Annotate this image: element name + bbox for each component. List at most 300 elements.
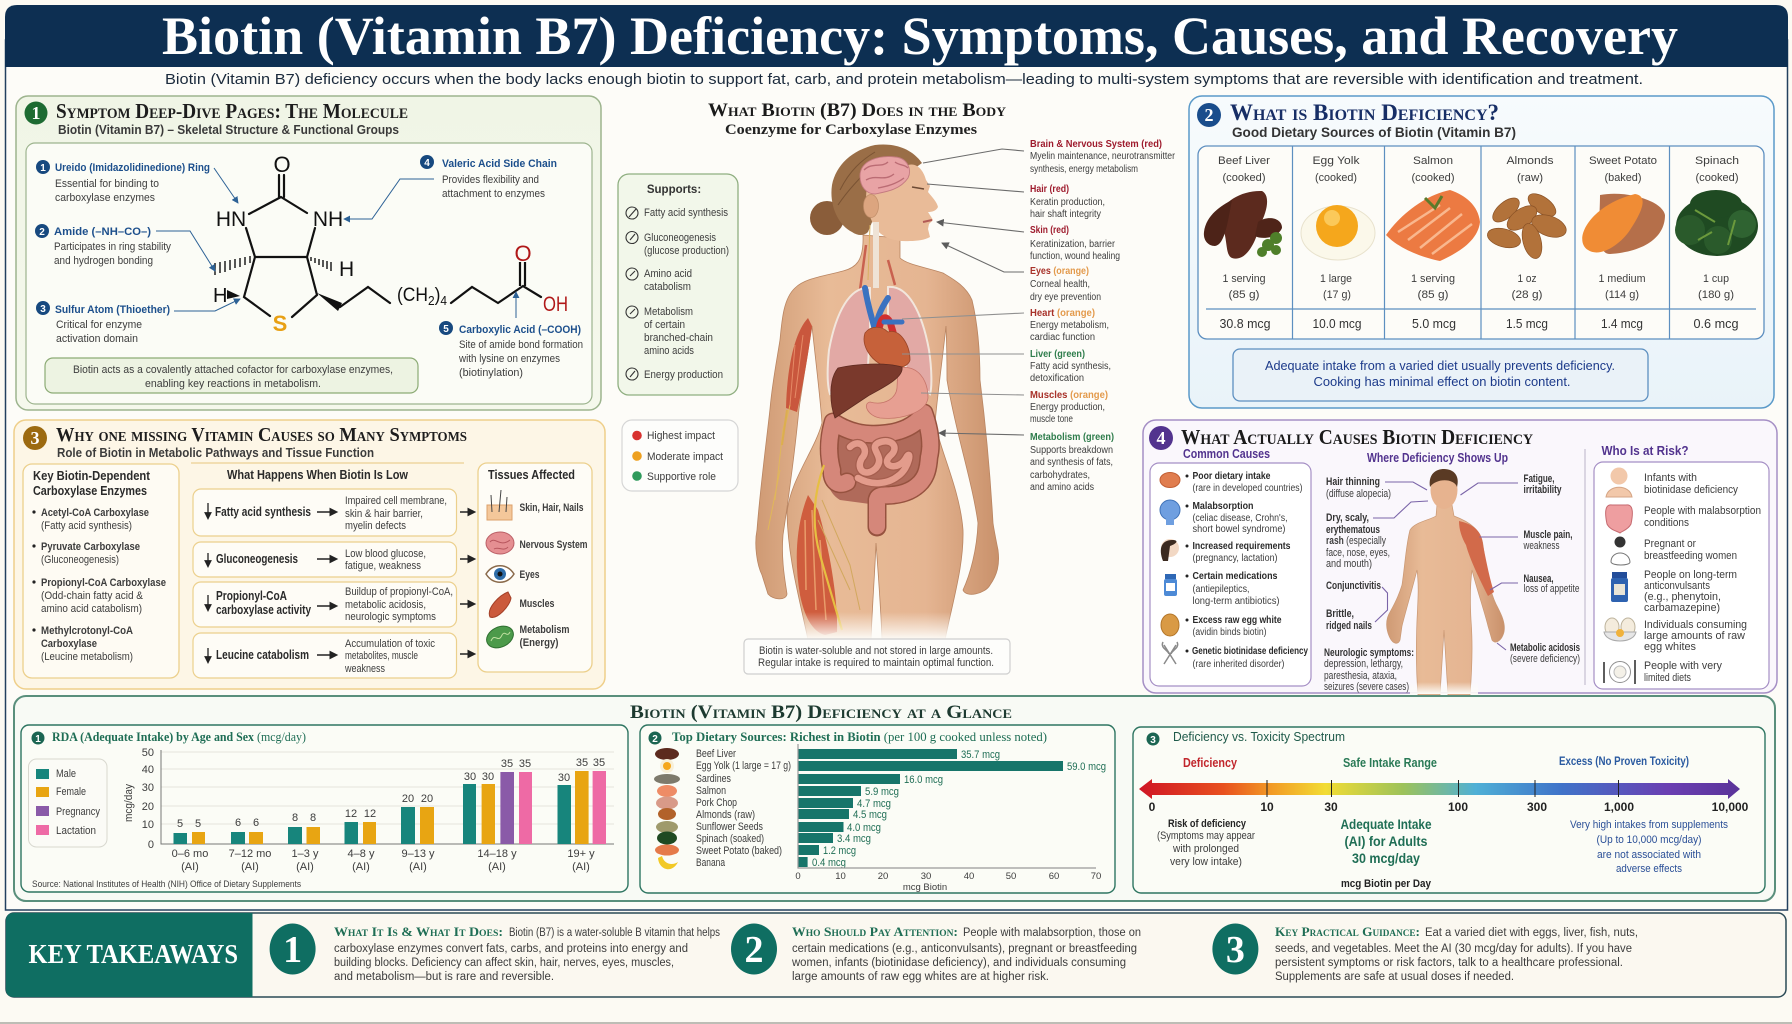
table: food sources: 10.0 mcg [1312,316,1362,331]
label: metabolism: and synthesis of fats, [1030,457,1113,468]
box: who is at risk: Infants with [1644,472,1697,484]
badge 3 [23,426,47,450]
legend: RDA [28,759,107,847]
note: water soluble: Biotin is water-soluble and not stored in large amounts. [759,645,993,657]
chart: top dietary sources: Beef Liver [696,748,736,760]
chart: spectrum: very low intake) [1170,856,1242,868]
label: brain [1030,138,1176,175]
row: gluconeogenesis: Low blood glucose, [345,548,426,560]
label: liver: Liver (green) [1030,348,1085,360]
intestines [823,412,935,527]
biotin structure: OH [543,293,568,316]
row: propionyl-CoA: Propionyl-CoA [216,589,287,603]
callout 3: sulfur: 3 [40,304,46,315]
label: eyes: dry eye prevention [1030,292,1101,303]
chart: RDA: 12 [345,808,357,820]
badge 4 [1149,426,1173,450]
box: enzymes: Pyruvate Carboxylase [41,541,140,553]
symptom labels: Brittle, [1326,608,1354,620]
symptom labels: Conjunctivitis [1326,580,1381,592]
symptom labels: paresthesia, ataxia, [1324,670,1397,682]
heading: molecule: Symptom Deep-Dive Pages: The Molecule [56,99,408,123]
chart: RDA: 30 [558,772,570,784]
icon: spinach [1675,190,1758,256]
icon: raw eggs [1604,618,1636,641]
banner: key takeaways [6,913,252,997]
note: cofactor: Biotin acts as a covalently attached cofactor for carboxylase enzymes, [73,364,393,376]
callout 4: valeric chain: Provides flexibility and [442,174,539,186]
icon: woman [1161,539,1179,561]
label: metabolism: and amino acids [1030,482,1094,493]
biotin structure: ) [435,285,440,306]
chart: top dietary sources: 30 [921,871,931,882]
chart: top dietary sources: Almonds (raw) [696,809,755,821]
box: common causes: (rare in developed countries) [1192,483,1302,494]
symptom labels: Hair thinning [1326,476,1380,488]
heading: what biotin does: What Biotin (B7) Does in the Body [708,100,1007,121]
box: enzymes: (Fatty acid synthesis) [41,520,132,532]
panel: supports: branched-chain [644,332,713,344]
legend: impact: Highest impact [647,430,715,442]
panel: supports: (glucose production) [644,245,729,257]
chart: top dietary sources: 1.2 mcg [823,845,856,857]
label: skin: function, wound healing [1030,251,1120,262]
box: tissues affected: Eyes [520,569,540,581]
box: who is at risk: limited diets [1644,672,1691,684]
box: common causes: Certain medications [1192,570,1278,582]
chart: spectrum: 0 [1149,800,1156,814]
takeaway 1: What It Is & What It Does: [334,924,503,939]
chart: top dietary sources: 0.4 mcg [812,857,846,869]
chart: RDA: mcg/day [123,784,135,822]
icon: eye [486,566,514,582]
box: common causes: Malabsorption [1192,500,1254,512]
biotin structure: S [273,311,287,336]
symptom labels: Muscle pain, [1524,529,1572,541]
callout 3: sulfur [36,299,240,345]
box: tissues affected: (Energy) [520,637,559,649]
table: food sources: (cooked) [1222,172,1266,184]
label: heart: Heart (orange) [1030,307,1095,319]
table: food sources: 1 serving [1222,273,1266,285]
chart: RDA: 20 [421,793,433,805]
legend: RDA: Lactation [56,825,96,837]
box: common causes: short bowel syndrome) [1192,524,1286,535]
subheading: where it shows: Where Deficiency Shows Up [1367,451,1508,465]
label: skin: Keratinization, barrier [1030,239,1116,250]
box: enzymes [23,464,179,678]
chart: RDA: (AI) [241,861,259,873]
chart: top dietary sources: 50 [1006,871,1016,882]
chart: top dietary sources: 10 [835,871,846,882]
chart: RDA: 5 [195,818,201,830]
table: food sources: 1.4 mcg [1601,316,1643,331]
chart: RDA: Source: National Institutes of Health (NIH) Office of Dietary Supplements [32,879,301,890]
legend: RDA: Pregnancy [56,806,100,818]
label: muscles: Energy production, [1030,402,1105,413]
box: common causes: Poor dietary intake [1192,470,1271,482]
takeaway 1: 1 [283,929,302,971]
symptom labels: (severe deficiency) [1510,653,1580,665]
label: metabolism [1030,431,1114,493]
takeaway 2: large amounts of raw egg whites are at higher risk. [792,971,1049,983]
chart: RDA: (AI) [572,861,590,873]
biotin structure [213,152,568,336]
row: leucine catabolism: Accumulation of toxic [345,638,435,650]
box: tissues affected [478,463,592,672]
chart: spectrum: 30 mcg/day [1352,850,1420,866]
takeaway 1: building blocks. Deficiency can affect skin, hair, nerves, eyes, muscles, [334,957,674,969]
table: food sources: 30.8 mcg [1220,316,1270,331]
box: who is at risk: People on long-term [1644,569,1737,581]
row: leucine catabolism: Leucine catabolism [216,648,309,662]
label: brain: Myelin maintenance, neurotransmitter [1030,151,1176,162]
table: food sources: 1 large [1320,273,1352,285]
chart: top dietary sources: 70 [1091,871,1101,882]
row: fatty acid synthesis: Impaired cell membrane, [345,495,447,507]
callout 2: amide: Participates in ring stability [54,241,171,253]
chart: RDA: RDA (Adequate Intake) by Age and Sex (mcg/day) [52,729,306,744]
icon: head [1160,500,1180,525]
box: common causes: Increased requirements [1192,540,1291,552]
subheading: role: Role of Biotin in Metabolic Pathways and Tissue Function [57,446,374,460]
callout 1: ureido ring: Essential for binding to [55,178,159,190]
chart: spectrum: 1,000 [1604,800,1634,814]
takeaway 2: People with malabsorption, those on [963,927,1141,939]
panel: why one vitamin [14,420,605,689]
legend: impact: Moderate impact [647,451,723,463]
row: gluconeogenesis [193,542,474,577]
chart: RDA: 6 [253,817,259,829]
row: fatty acid synthesis: skin & hair barrier, [345,508,423,520]
chart: top dietary sources: 60 [1049,871,1059,882]
chart: RDA: 0–6 mo [172,848,208,860]
symptom labels: Metabolic acidosis [1510,642,1580,654]
symptom labels: depression, lethargy, [1324,658,1403,670]
box: enzymes: (Gluconeogenesis) [41,554,119,566]
chart: top dietary sources: Top Dietary Sources: Richest in Biotin (per 100 g cooked unless noted) [672,730,1047,744]
icon: intestines [1606,505,1632,533]
badge 4: 4 [1156,428,1166,448]
chart: top dietary sources: Spinach (soaked) [696,833,764,845]
icon: sweet potato [1582,194,1665,254]
illustration: male figure [1387,469,1504,695]
label: liver: Fatty acid synthesis, [1030,361,1111,372]
label: heart: cardiac function [1030,332,1095,343]
symptom labels: loss of appetite [1524,583,1580,595]
row: propionyl-CoA: carboxylase activity [216,603,311,617]
takeaway 3: Supplements are safe at usual doses if needed. [1275,971,1514,983]
label: brain: synthesis, energy metabolism [1030,164,1138,175]
takeaway 3: Key Practical Guidance: [1275,924,1420,939]
box: tissues affected: Muscles [520,598,554,610]
biotin structure: O [273,152,291,177]
note: water soluble: Regular intake is required to maintain optimal function. [758,657,994,669]
callout 5: carboxylic acid: (biotinylation) [459,367,523,379]
chart: top dietary sources: 20 [878,871,888,882]
chart: spectrum: adverse effects [1616,863,1682,875]
great vessels [865,288,902,345]
label: muscles: Muscles (orange) [1030,389,1108,401]
chart: RDA: 35 [519,758,531,770]
chart: spectrum: with prolonged [1172,843,1239,855]
icon: medicine jar [1611,572,1628,602]
subheading: molecule: Biotin (Vitamin B7) – Skeletal Structure & Functional Groups [58,123,399,137]
box: who is at risk: Pregnant or [1644,538,1696,550]
row: fatty acid synthesis [193,489,474,536]
table: food sources: (raw) [1517,172,1543,184]
head and hair [810,144,938,241]
heading: deficiency: What is Biotin Deficiency? [1230,100,1499,125]
table: food sources: 0.6 mcg [1694,316,1738,331]
arm muscles [768,318,812,530]
icon: infant [1606,468,1632,497]
table: food sources: Spinach [1695,155,1739,167]
table: food sources: (baked) [1604,172,1642,184]
chart: spectrum: are not associated with [1597,849,1701,861]
chart: top dietary sources: Banana [696,857,726,869]
callout 3: sulfur: activation domain [56,333,138,345]
box: who is at risk: conditions [1644,517,1689,529]
chart: RDA: 35 [593,757,605,769]
chart: RDA: 30 [482,771,494,783]
title banner: Biotin (Vitamin B7) Deficiency: Symptoms, Causes, and Recovery [162,6,1678,66]
chart: top dietary sources: 0 [795,871,801,882]
box: who is at risk: breastfeeding women [1644,550,1737,562]
lungs [828,287,931,394]
row: fatty acid synthesis: myelin defects [345,520,406,532]
table: food sources: Salmon [1413,155,1453,167]
takeaway 3: seeds, and vegetables. Meet the AI (30 mcg/day for adults). If you have [1275,943,1632,955]
table: food sources: (17 g) [1323,289,1351,301]
chart: RDA: 50 [142,747,154,759]
box: common causes [1150,463,1311,686]
legend: RDA: Female [56,786,86,798]
chart: top dietary sources: 59.0 mcg [1067,761,1106,773]
box: tissues affected: Skin, Hair, Nails [520,502,584,514]
chart: RDA: (AI) [352,861,370,873]
organ labels [902,138,1176,493]
panel: supports: Metabolism [644,306,693,318]
panel: what is biotin deficiency [1189,96,1774,408]
icon: DNA scissors [1162,642,1178,664]
panel: the molecule [16,96,601,410]
panel: key takeaways [6,913,1786,997]
row: gluconeogenesis: Gluconeogenesis [216,552,298,566]
label: liver: detoxification [1030,373,1084,384]
chart: spectrum: Risk of deficiency [1168,818,1247,830]
note: adequate intake: Adequate intake from a varied diet usually prevents deficiency. [1265,358,1615,373]
chart: top dietary sources: 40 [964,871,974,882]
row: fatty acid synthesis: Fatty acid synthesis [215,505,311,519]
chart: spectrum: (Symptoms may appear [1157,830,1255,842]
row: leucine catabolism: metabolites, muscle [345,650,418,662]
badge 2 [1197,103,1221,127]
panel: supports: Gluconeogenesis [644,232,716,244]
note: cofactor: enabling key reactions in metabolism. [145,378,321,390]
chart: RDA: 20 [142,801,154,813]
icon: skin [487,490,512,520]
takeaway 3: Eat a varied diet with eggs, liver, fish, nuts, [1425,927,1638,939]
callout 4: valeric chain: Valeric Acid Side Chain [442,158,557,170]
icon: beef liver [1204,191,1282,259]
biotin structure: (CH [397,285,431,306]
table: food sources: 1 serving [1411,273,1455,285]
callout 1: ureido ring: 1 [40,163,46,174]
chart: RDA [21,725,628,892]
table: food sources: 5.0 mcg [1412,316,1456,331]
takeaway 2: Who Should Pay Attention: [792,924,958,939]
chart: spectrum: Adequate Intake [1340,816,1432,832]
box: who is at risk: carbamazepine) [1644,602,1720,614]
subheading: common causes: Common Causes [1183,447,1270,461]
thigh muscles and nerves [797,465,860,635]
icon: egg white [1161,614,1179,636]
panel: supports: catabolism [644,281,691,293]
heading: causes: What Actually Causes Biotin Deficiency [1181,425,1533,449]
illustration: female anatomy [756,144,999,640]
table: food sources: 1 medium [1598,273,1646,285]
chart: spectrum: (AI) for Adults [1344,833,1428,849]
box: enzymes: Methylcrotonyl-CoA [41,625,133,637]
note: cofactor [45,358,418,393]
box: common causes: Excess raw egg white [1192,614,1282,626]
callout 2: amide [35,224,215,271]
liver [831,364,902,418]
biotin structure: O [514,241,532,266]
callout 2: amide: and hydrogen bonding [54,255,153,267]
box: who is at risk: biotinidase deficiency [1644,484,1738,496]
takeaway 1: and metabolism—but is rare and reversible. [334,971,554,983]
chart: RDA: 9–13 y [401,848,435,860]
chart: spectrum: 10 [1260,800,1274,814]
row: propionyl-CoA [193,582,474,627]
chart: RDA: 12 [364,808,376,820]
badge 1: 1 [32,103,40,123]
chart: top dietary sources: Sardines [696,773,731,785]
table: food sources: (114 g) [1605,289,1639,301]
icon: egg [1301,205,1375,260]
symptom labels: seizures (severe cases) [1324,681,1409,693]
box: who is at risk: People with very [1644,660,1722,672]
box: who is at risk: People with malabsorption [1644,505,1761,517]
heading: what biotin does: Coenzyme for Carboxylase Enzymes [725,122,977,138]
biotin structure: H [339,258,354,281]
label: eyes: Eyes (orange) [1030,265,1089,277]
label: muscles: muscle tone [1030,414,1073,425]
symptom labels: Nausea, [1524,573,1554,585]
box: tissues affected: Metabolism [520,624,570,636]
panel: supports: Amino acid [644,268,692,280]
table: food sources: Almonds [1506,155,1554,167]
box: tissues affected: Nervous System [520,539,588,551]
callout 1: ureido ring: carboxylase enzymes [55,192,155,204]
label: skin [1030,224,1120,262]
label: heart [1030,307,1109,343]
table: food sources: (cooked) [1412,172,1454,184]
row: gluconeogenesis: fatigue, weakness [345,560,421,572]
subheading: at risk: Who Is at Risk? [1602,443,1689,458]
callout 3: sulfur: Sulfur Atom (Thioether) [55,304,170,316]
takeaway 1 [270,924,720,983]
chart: RDA: (AI) [181,861,199,873]
box: common causes: (avidin binds biotin) [1192,627,1266,638]
box: enzymes: Carboxylase [41,638,97,650]
label: hair: hair shaft integrity [1030,209,1101,220]
chart: top dietary sources: 4.5 mcg [853,809,887,821]
row: propionyl-CoA: Buildup of propionyl-CoA, [345,586,453,598]
symptom labels: Dry, scaly, [1326,512,1369,524]
chart: spectrum: 300 [1527,800,1547,814]
box: enzymes: (Odd-chain fatty acid & [41,590,144,602]
chart: spectrum: Very high intakes from supplements [1570,819,1728,831]
box: common causes: (celiac disease, Crohn's, [1192,513,1288,524]
label: heart: Energy metabolism, [1030,320,1109,331]
legend: impact: Supportive role [647,471,716,483]
table: food sources: Egg Yolk [1312,155,1360,167]
label: skin: Skin (red) [1030,224,1069,236]
panel: at a glance [14,696,1775,901]
row: propionyl-CoA: neurologic symptoms [345,611,436,623]
box: who is at risk [1594,462,1769,689]
label: muscles [1030,389,1108,425]
takeaway 2: certain medications (e.g., anticonvulsants), pregnant or breastfeeding [792,943,1137,955]
box: common causes: (rare inherited disorder) [1192,659,1284,670]
symptom labels: erythematous [1326,524,1380,536]
panel: supports [618,174,738,395]
chart: RDA: 10 [142,819,154,831]
box: enzymes: Key Biotin-Dependent [33,469,151,483]
chart: RDA: 1 [35,734,41,745]
takeaway 2 [731,924,1141,983]
takeaway 1: carboxylase enzymes convert fats, carbs, and proteins into energy and [334,943,688,955]
chart: RDA: 30 [142,782,154,794]
table: food sources: (85 g) [1228,289,1260,301]
callout 2: amide: Amide (–NH–CO–) [54,226,151,238]
callout 5: carboxylic acid: 5 [443,324,449,335]
box: enzymes: Acetyl-CoA Carboxylase [41,507,149,519]
biotin structure: H [213,285,227,307]
symptom labels: face, nose, eyes, [1326,547,1390,559]
callout 5: carboxylic acid: with lysine on enzymes [458,353,560,365]
chart: spectrum: 100 [1448,800,1468,814]
symptom labels: and mouth) [1326,558,1372,570]
chart: RDA: 6 [235,817,241,829]
legend: RDA: Male [56,768,76,780]
panel: supports: amino acids [644,345,694,357]
chart: spectrum: Safe Intake Range [1343,756,1437,770]
box: who is at risk: (e.g., phenytoin, [1644,591,1721,603]
heading: what happens: What Happens When Biotin Is Low [227,467,409,482]
takeaway 3 [1212,924,1638,983]
chart: RDA: 1–3 y [292,848,319,860]
row: leucine catabolism [193,633,474,678]
symptom labels [1324,473,1580,693]
callout 1: ureido ring [36,160,238,204]
chart: spectrum: (Up to 10,000 mcg/day) [1596,834,1702,846]
chart: spectrum: Deficiency vs. Toxicity Spectrum [1173,730,1345,744]
heart [864,327,910,368]
chart: top dietary sources: 5.9 mcg [865,786,899,798]
heading: what biotin does [708,100,1007,138]
table: food sources: Sweet Potato [1589,155,1657,167]
box: who is at risk: egg whites [1644,641,1696,653]
chart: top dietary sources: mcg Biotin [903,882,947,893]
symptom labels: weakness [1523,540,1560,552]
callout 5: carboxylic acid [439,292,583,379]
label: metabolism: Supports breakdown [1030,445,1113,456]
table: food sources: (180 g) [1698,289,1734,301]
